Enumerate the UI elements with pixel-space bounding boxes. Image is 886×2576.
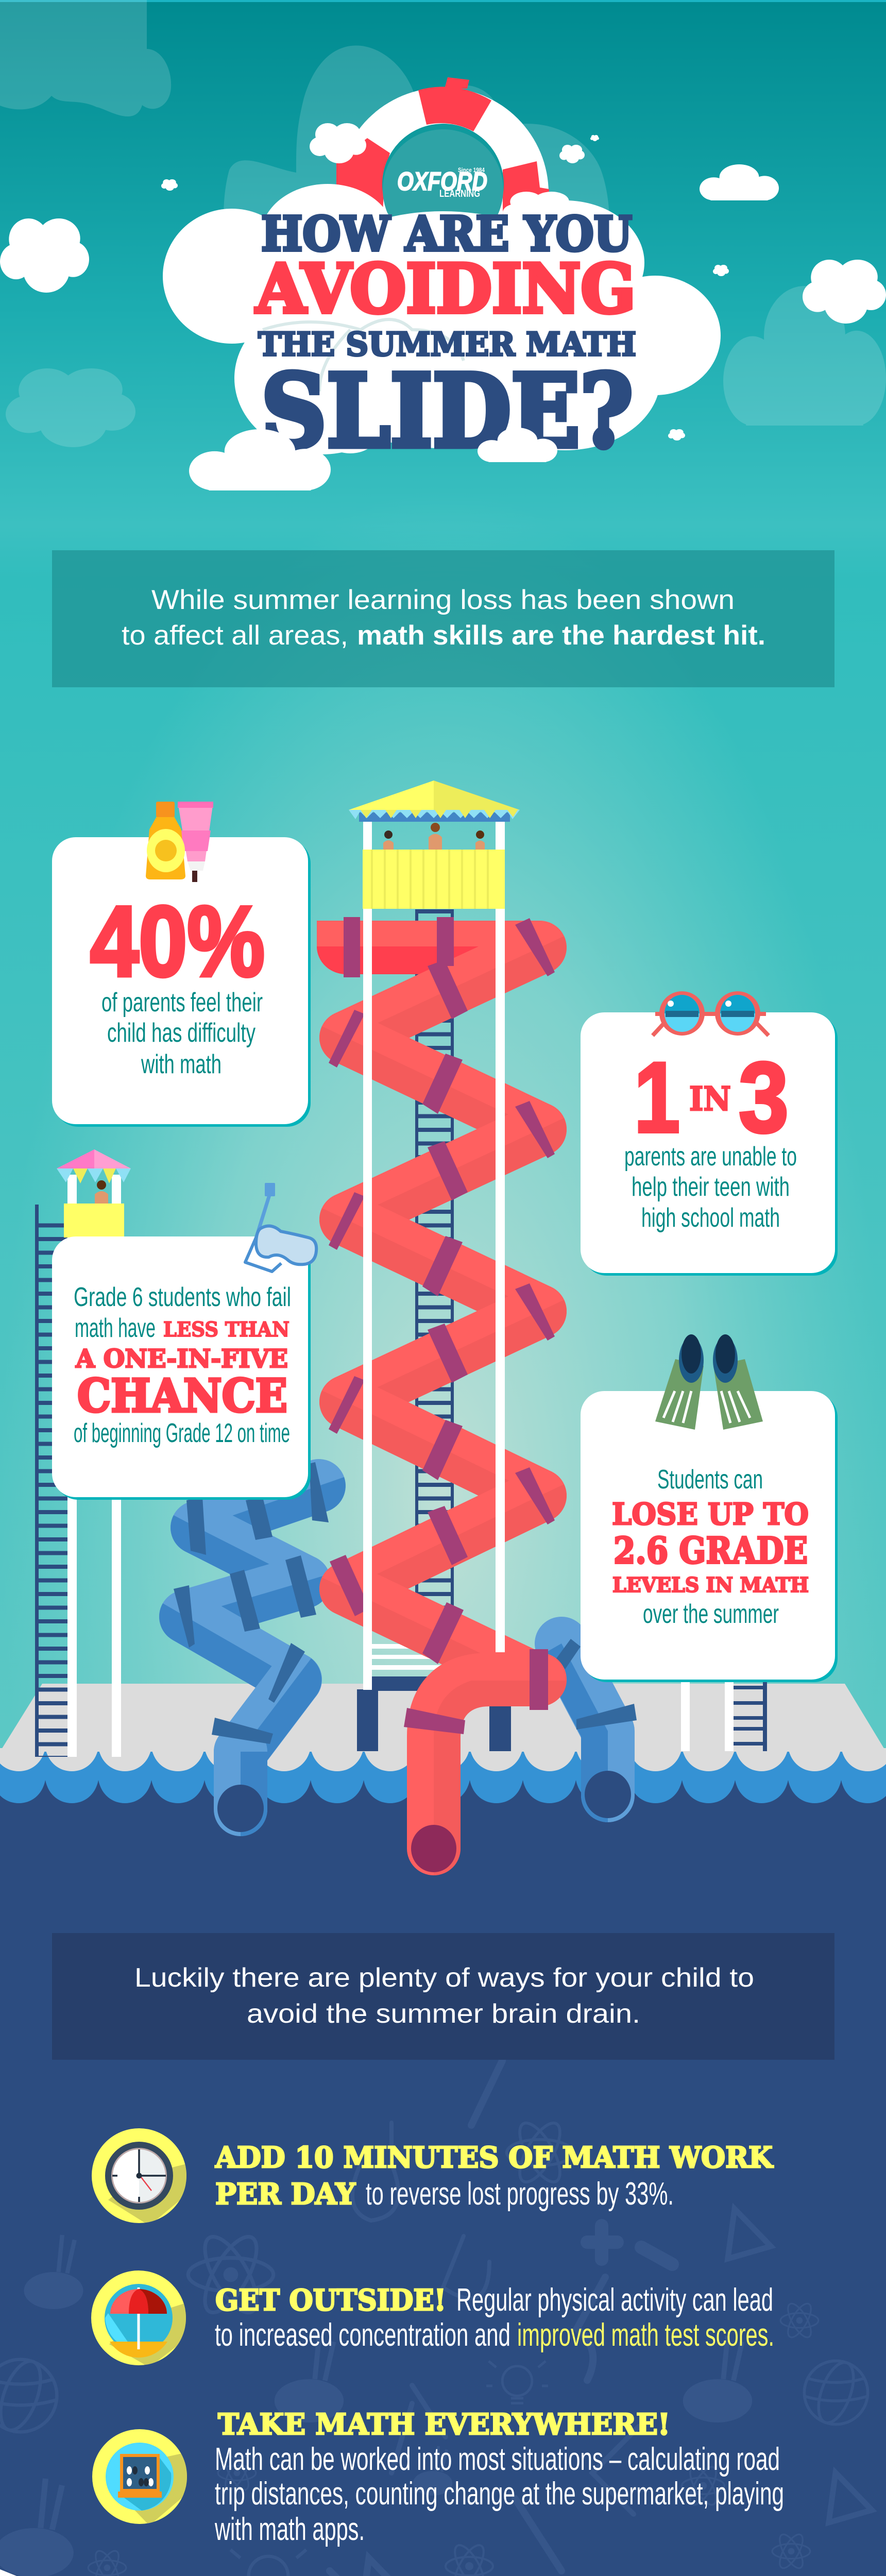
brain drain banner <box>52 1933 834 2060</box>
tip 1: add 10 minutes: PER DAY <box>215 2177 356 2211</box>
red slide exit <box>404 1649 567 1875</box>
card: lose up to 2.6 grade levels <box>581 1391 838 1682</box>
center ladder <box>415 909 454 1631</box>
tip 2: get outside: to increased concentration and <box>215 2317 510 2353</box>
title: THE SUMMER MATH <box>258 325 636 363</box>
icon: sunscreen bottle and tube <box>146 802 213 882</box>
swimmers in tower <box>383 823 485 850</box>
logo in ring: OXFORD <box>397 167 487 196</box>
intro banner: math skills are the hardest hit. <box>357 620 765 651</box>
card: 1 in 3 parents: parents are unable to <box>624 1142 797 1172</box>
logo in ring: LEARNING <box>439 189 480 199</box>
big white title cloud <box>163 123 721 454</box>
card: 40% of parents: of parents feel their <box>101 988 263 1018</box>
logo in ring: Since 1984 <box>458 166 485 174</box>
card: grade 6 students: A ONE-IN-FIVE <box>75 1344 288 1374</box>
card: 40% of parents: 40% <box>90 886 265 997</box>
card: lose up to 2.6 grade levels: LEVELS IN MATH <box>612 1573 809 1597</box>
tip 3: take math everywhere <box>92 2408 784 2547</box>
clouds in front of title <box>189 428 557 490</box>
card: 1 in 3 parents <box>581 1012 838 1276</box>
card: grade 6 students: LESS THAN <box>163 1318 289 1342</box>
icon: clock <box>92 2128 186 2226</box>
tip 2: get outside <box>91 2270 774 2367</box>
life ring with logo <box>336 77 549 299</box>
card: 1 in 3 parents: IN <box>689 1080 731 1118</box>
right ladder and posts <box>681 1680 767 1751</box>
translucent background clouds <box>0 0 886 447</box>
brain drain banner: Luckily there are plenty of ways for your child to <box>134 1963 754 1993</box>
intro banner: to affect all areas, <box>122 620 348 651</box>
icon: sunglasses <box>653 991 769 1036</box>
card: 1 in 3 parents: 3 <box>739 1042 789 1154</box>
card: grade 6 students: math have <box>75 1313 156 1343</box>
tower base and rails <box>357 1644 511 1751</box>
title: HOW ARE YOU <box>261 206 632 262</box>
right blue slide <box>539 1639 637 1822</box>
tip 3: take math everywhere: TAKE MATH EVERYWHERE! <box>218 2408 670 2442</box>
card: 40% of parents: with math <box>141 1049 222 1079</box>
card: lose up to 2.6 grade levels: over the summer <box>643 1599 779 1629</box>
card: lose up to 2.6 grade levels: 2.6 GRADE <box>614 1529 808 1572</box>
tip 2: get outside: GET OUTSIDE! <box>215 2283 446 2317</box>
title: SLIDE? <box>261 352 633 470</box>
tower top <box>349 781 520 909</box>
card: grade 6 students: Grade 6 students who fail <box>74 1282 291 1312</box>
card: grade 6 students: of beginning Grade 12 on time <box>74 1418 290 1448</box>
icon: abacus <box>92 2429 187 2526</box>
card: grade 6 students <box>52 1236 311 1500</box>
intro banner <box>52 550 834 687</box>
small tower roof <box>57 1149 131 1238</box>
card: 40% of parents: child has difficulty <box>107 1018 255 1048</box>
card: 40% of parents <box>52 837 311 1127</box>
tower posts <box>363 822 505 1690</box>
left ladder and small tower <box>35 1149 131 1757</box>
tip 1: add 10 minutes: ADD 10 MINUTES OF MATH WORK <box>215 2141 774 2175</box>
title: AVOIDING <box>255 249 636 328</box>
pool deck and water <box>0 1684 886 2576</box>
left blue slide <box>159 1462 346 1836</box>
icon: snorkel and goggles <box>245 1183 316 1272</box>
navy section curved bottom <box>0 2569 886 2576</box>
card: lose up to 2.6 grade levels: Students can <box>657 1465 763 1495</box>
card: 1 in 3 parents: help their teen with <box>632 1172 790 1202</box>
brain drain banner: avoid the summer brain drain. <box>247 1999 640 2029</box>
math doodle background <box>0 2061 872 2576</box>
tip 1: add 10 minutes: to reverse lost progress by 33%. <box>366 2176 674 2212</box>
tip 3: take math everywhere: with math apps. <box>214 2512 365 2547</box>
card: 1 in 3 parents: high school math <box>641 1203 780 1233</box>
card: 1 in 3 parents: 1 <box>634 1042 680 1154</box>
icon: flippers <box>655 1334 763 1430</box>
tip 1: add 10 minutes <box>92 2128 774 2226</box>
sky and water park background <box>0 0 886 1762</box>
icon: beach umbrella <box>91 2270 186 2367</box>
title <box>255 206 636 470</box>
red zigzag slide <box>317 917 567 1704</box>
intro banner: While summer learning loss has been shown <box>151 585 735 615</box>
card: lose up to 2.6 grade levels: LOSE UP TO <box>612 1497 809 1532</box>
small white clouds <box>0 135 886 440</box>
card: grade 6 students: CHANCE <box>77 1369 287 1422</box>
